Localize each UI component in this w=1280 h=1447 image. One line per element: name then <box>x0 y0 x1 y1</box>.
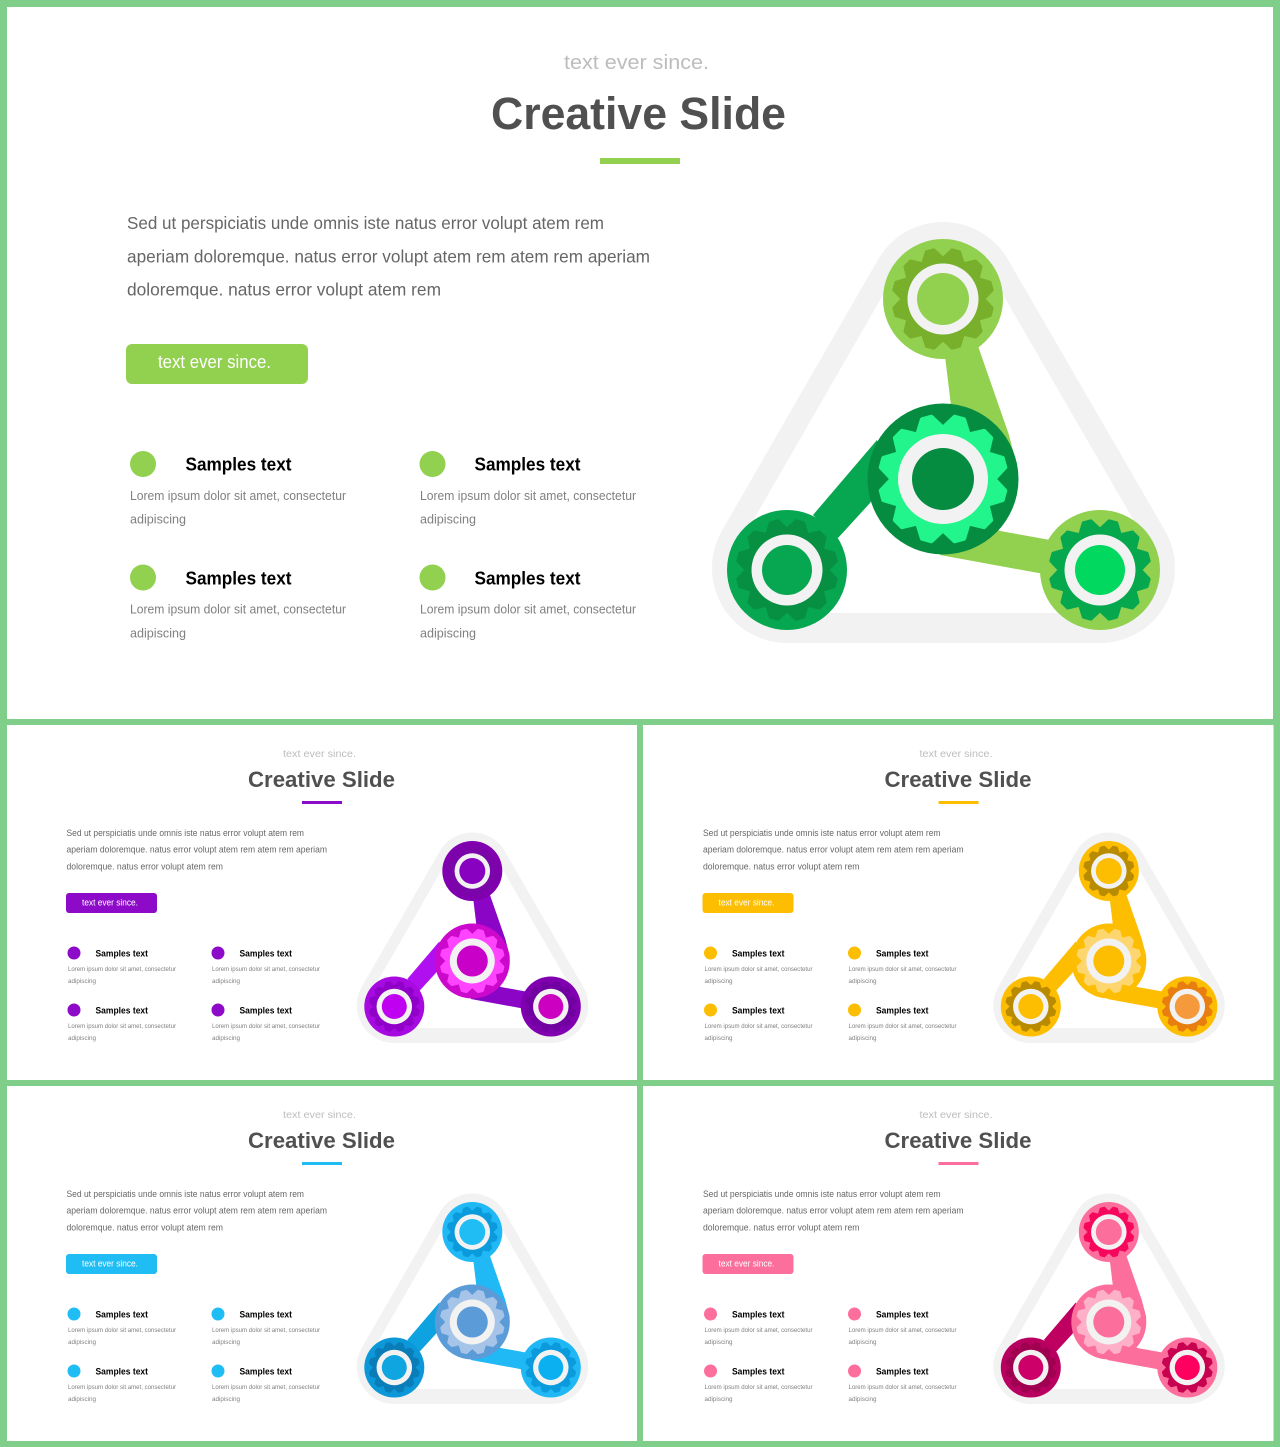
hub: right <box>1157 976 1217 1036</box>
list item 1: adipiscing <box>68 1339 97 1346</box>
hub: centre <box>868 404 1018 554</box>
list item 1: Samples text <box>186 454 292 474</box>
list item 4 <box>212 1364 320 1403</box>
title: Creative Slide <box>491 88 786 139</box>
list item 2: Samples text <box>240 948 292 958</box>
list item 2 <box>420 451 636 526</box>
intro paragraph <box>703 828 964 872</box>
list item 2: adipiscing <box>212 978 241 985</box>
title: Creative Slide <box>248 1128 395 1153</box>
button: text ever since. <box>82 898 138 908</box>
button: text ever since. <box>718 898 774 908</box>
hub: centre <box>435 924 510 998</box>
hub: right <box>1040 510 1160 630</box>
list item 3: Lorem ipsum dolor sit amet, consectetur <box>130 602 346 616</box>
panel: pink slide <box>643 1086 1274 1441</box>
intro paragraph: doloremque. natus error volupt atem rem <box>66 1222 223 1232</box>
list item 1: Lorem ipsum dolor sit amet, consectetur <box>68 966 176 973</box>
title underline <box>938 1162 978 1165</box>
list item 1: Samples text <box>96 948 148 958</box>
list item 4 <box>848 1364 956 1403</box>
title underline <box>302 801 342 804</box>
button <box>702 893 794 913</box>
intro paragraph: aperiam doloremque. natus error volupt atem rem atem rem aperiam <box>703 844 964 854</box>
list item 4: Samples text <box>474 568 580 588</box>
spinner diagram: pink <box>993 1193 1225 1404</box>
panel: main green slide <box>7 7 1273 719</box>
panel: blue slide <box>7 1086 637 1441</box>
list item 2 <box>848 1308 956 1346</box>
intro paragraph: aperiam doloremque. natus error volupt atem rem atem rem aperiam <box>66 844 327 854</box>
intro paragraph: Sed ut perspiciatis unde omnis iste natus error volupt atem rem <box>703 1189 940 1199</box>
list item 1: Lorem ipsum dolor sit amet, consectetur <box>68 1327 176 1334</box>
button <box>66 1254 157 1274</box>
hub: left <box>727 510 847 630</box>
hub: top <box>1079 1202 1139 1262</box>
title underline <box>600 158 680 164</box>
list item 2: Samples text <box>876 948 928 958</box>
title underline <box>938 801 978 804</box>
intro paragraph: Sed ut perspiciatis unde omnis iste natus error volupt atem rem <box>703 828 940 838</box>
list item 3: adipiscing <box>704 1396 733 1403</box>
list item 3: Samples text <box>732 1006 784 1016</box>
hub: centre <box>1071 1284 1146 1360</box>
hub: centre <box>1071 924 1146 998</box>
intro paragraph: Sed ut perspiciatis unde omnis iste natus error volupt atem rem <box>66 1189 304 1199</box>
list item 1 <box>704 1308 812 1346</box>
button <box>66 893 157 913</box>
list item 2: adipiscing <box>420 512 476 526</box>
list item 3: Samples text <box>96 1006 148 1016</box>
list item 2: Samples text <box>474 454 580 474</box>
hub: top <box>442 841 502 901</box>
button <box>126 344 308 384</box>
spinner diagram: yellow <box>993 832 1225 1043</box>
intro paragraph: doloremque. natus error volupt atem rem <box>703 862 860 872</box>
list item 4: adipiscing <box>848 1035 877 1042</box>
list item 1: Lorem ipsum dolor sit amet, consectetur <box>704 966 812 973</box>
hub: top <box>442 1202 502 1262</box>
spinner diagram: purple <box>357 832 588 1043</box>
intro paragraph: aperiam doloremque. natus error volupt atem rem atem rem aperiam <box>66 1206 327 1216</box>
list item 1 <box>68 946 176 985</box>
list item 4: Lorem ipsum dolor sit amet, consectetur <box>420 602 636 616</box>
list item 1 <box>704 946 812 985</box>
list item 2: Lorem ipsum dolor sit amet, consectetur <box>212 1327 320 1334</box>
list item 1: adipiscing <box>68 978 97 985</box>
list item 3 <box>68 1004 176 1042</box>
list item 1: Samples text <box>96 1310 148 1320</box>
list item 4 <box>848 1004 956 1042</box>
hub: right <box>521 1338 581 1398</box>
list item 1: Lorem ipsum dolor sit amet, consectetur <box>130 489 346 503</box>
list item 3: adipiscing <box>130 626 186 640</box>
list item 4: Samples text <box>240 1366 292 1376</box>
list item 4: Lorem ipsum dolor sit amet, consectetur <box>848 1023 956 1030</box>
spinner diagram: blue <box>357 1193 588 1404</box>
list item 4: adipiscing <box>848 1396 877 1403</box>
panel: purple slide <box>7 725 637 1080</box>
list item 2: adipiscing <box>848 978 877 985</box>
list item 4: adipiscing <box>420 626 476 640</box>
list item 3 <box>704 1364 812 1403</box>
intro paragraph: doloremque. natus error volupt atem rem <box>127 280 441 300</box>
intro paragraph: doloremque. natus error volupt atem rem <box>703 1222 860 1232</box>
hub: left <box>364 1338 424 1398</box>
intro paragraph: Sed ut perspiciatis unde omnis iste natus error volupt atem rem <box>66 828 304 838</box>
list item 2: Lorem ipsum dolor sit amet, consectetur <box>420 489 636 503</box>
list item 4: Samples text <box>240 1006 292 1016</box>
hub: right <box>521 976 581 1036</box>
subtitle: text ever since. <box>283 749 356 760</box>
button: text ever since. <box>718 1258 774 1268</box>
button <box>702 1254 794 1274</box>
list item 4: Samples text <box>876 1006 928 1016</box>
subtitle: text ever since. <box>920 1110 992 1121</box>
title: Creative Slide <box>248 767 395 792</box>
list item 4 <box>420 564 636 640</box>
list item 3: Lorem ipsum dolor sit amet, consectetur <box>68 1384 176 1391</box>
list item 1 <box>68 1308 176 1346</box>
intro paragraph <box>703 1189 964 1232</box>
list item 2 <box>212 946 320 985</box>
list item 2 <box>212 1308 320 1346</box>
list item 2: Samples text <box>876 1310 928 1320</box>
list item 3 <box>68 1364 176 1403</box>
intro paragraph: doloremque. natus error volupt atem rem <box>66 862 223 872</box>
hub: left <box>1001 1338 1061 1398</box>
button: text ever since. <box>82 1258 138 1268</box>
list item 2: adipiscing <box>212 1339 241 1346</box>
hub: right <box>1157 1338 1217 1398</box>
intro paragraph: Sed ut perspiciatis unde omnis iste natus error volupt atem rem <box>127 213 604 233</box>
list item 3 <box>704 1004 812 1042</box>
title: Creative Slide <box>884 767 1032 792</box>
hub: centre <box>435 1284 510 1360</box>
title: Creative Slide <box>884 1128 1032 1153</box>
intro paragraph <box>66 1189 327 1232</box>
list item 3: Lorem ipsum dolor sit amet, consectetur <box>704 1023 812 1030</box>
list item 1: adipiscing <box>130 512 186 526</box>
list item 3: adipiscing <box>68 1396 97 1403</box>
list item 4: Lorem ipsum dolor sit amet, consectetur <box>848 1384 956 1391</box>
list item 1: adipiscing <box>704 978 733 985</box>
intro paragraph: aperiam doloremque. natus error volupt atem rem atem rem aperiam <box>127 246 650 266</box>
list item 1: Samples text <box>732 1310 784 1320</box>
list item 4: Samples text <box>876 1366 928 1376</box>
intro paragraph <box>127 213 650 300</box>
list item 4: Lorem ipsum dolor sit amet, consectetur <box>212 1023 320 1030</box>
list item 3: Samples text <box>96 1366 148 1376</box>
spinner diagram: green <box>712 222 1175 643</box>
list item 4: Lorem ipsum dolor sit amet, consectetur <box>212 1384 320 1391</box>
hub: top <box>1079 841 1139 901</box>
list item 1 <box>130 451 346 526</box>
panel: yellow slide <box>643 725 1274 1080</box>
subtitle: text ever since. <box>564 52 709 74</box>
list item 3: Samples text <box>186 568 292 588</box>
list item 4 <box>212 1004 320 1042</box>
button: text ever since. <box>158 352 271 372</box>
list item 4: adipiscing <box>212 1396 241 1403</box>
list item 4: adipiscing <box>212 1035 241 1042</box>
list item 3 <box>130 564 346 640</box>
subtitle: text ever since. <box>920 749 992 760</box>
list item 3: Lorem ipsum dolor sit amet, consectetur <box>704 1384 812 1391</box>
list item 3: Samples text <box>732 1366 784 1376</box>
title underline <box>302 1162 342 1165</box>
list item 2 <box>848 946 956 985</box>
list item 1: Lorem ipsum dolor sit amet, consectetur <box>704 1327 812 1334</box>
list item 2: Lorem ipsum dolor sit amet, consectetur <box>848 1327 956 1334</box>
subtitle: text ever since. <box>283 1110 356 1121</box>
hub: left <box>1001 976 1061 1036</box>
list item 2: adipiscing <box>848 1339 877 1346</box>
list item 2: Lorem ipsum dolor sit amet, consectetur <box>848 966 956 973</box>
hub: top <box>883 239 1003 359</box>
list item 3: adipiscing <box>704 1035 733 1042</box>
hub: left <box>364 976 424 1036</box>
intro paragraph <box>66 828 327 872</box>
list item 1: Samples text <box>732 948 784 958</box>
list item 1: adipiscing <box>704 1339 733 1346</box>
intro paragraph: aperiam doloremque. natus error volupt atem rem atem rem aperiam <box>703 1206 964 1216</box>
list item 2: Samples text <box>240 1310 292 1320</box>
list item 3: Lorem ipsum dolor sit amet, consectetur <box>68 1023 176 1030</box>
list item 2: Lorem ipsum dolor sit amet, consectetur <box>212 966 320 973</box>
list item 3: adipiscing <box>68 1035 97 1042</box>
